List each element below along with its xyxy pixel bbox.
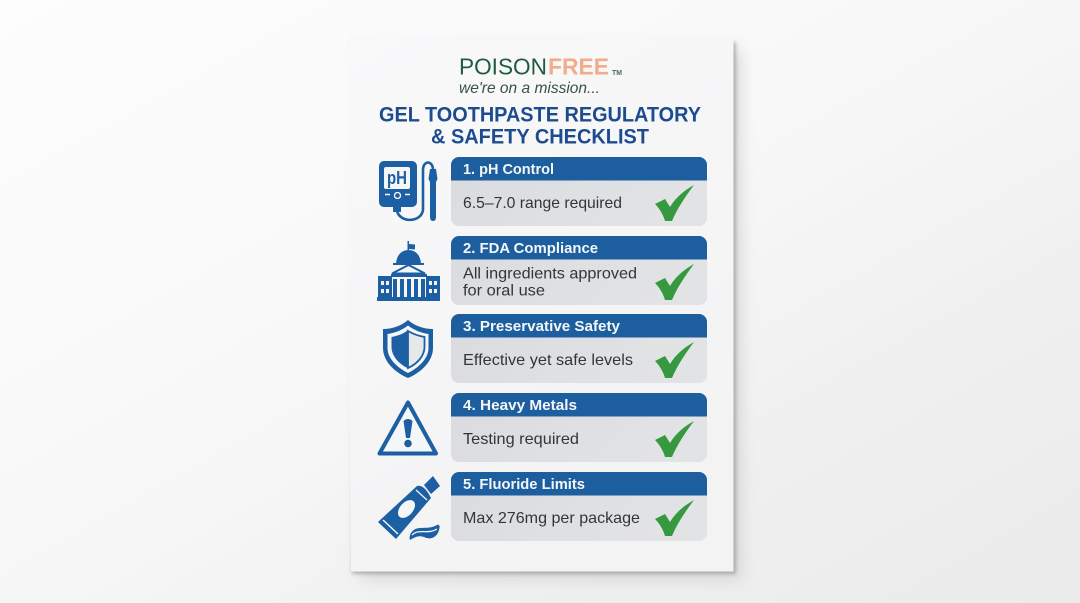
brand logo: POISON (459, 54, 547, 80)
checklist item 3: Preservative Safety (383, 314, 707, 383)
icon: pH meter: pH (387, 168, 407, 188)
icon: government building (377, 241, 440, 301)
card: FDA Compliance (451, 236, 707, 305)
icon: green check (655, 342, 694, 378)
card: Fluoride Limits: 5. Fluoride Limits (463, 476, 585, 493)
checklist item 5: Fluoride Limits (378, 472, 707, 541)
icon: green check (655, 500, 694, 536)
icon: green check (655, 185, 694, 221)
card: FDA Compliance: All ingredients approved (463, 266, 637, 282)
card: pH Control (451, 157, 707, 226)
card: Preservative Safety: 3. Preservative Safety (463, 318, 621, 335)
checklist item 1: pH Control (379, 157, 707, 226)
brand logo: TM (612, 68, 622, 77)
paper sheet (346, 34, 740, 578)
card: Heavy Metals: 4. Heavy Metals (463, 397, 577, 414)
icon: toothpaste tube (378, 476, 440, 540)
icon: pH meter (379, 161, 438, 221)
card: pH Control: 1. pH Control (463, 161, 554, 178)
title: & SAFETY CHECKLIST (431, 124, 649, 148)
icon: shield (383, 320, 433, 378)
title (379, 102, 701, 148)
icon: green check (655, 421, 694, 457)
card: FDA Compliance: 2. FDA Compliance (463, 240, 598, 257)
title: GEL TOOTHPASTE REGULATORY (379, 102, 701, 126)
icon: warning triangle (380, 402, 436, 454)
card: Heavy Metals (451, 393, 707, 462)
brand logo (459, 54, 622, 97)
card: Heavy Metals: Testing required (463, 431, 579, 448)
brand logo: FREE (548, 54, 609, 80)
checklist item 4: Heavy Metals (380, 393, 707, 462)
card: Preservative Safety (451, 314, 707, 383)
icon: green check (655, 264, 694, 300)
card: pH Control: 6.5–7.0 range required (463, 195, 622, 212)
checklist item 2: FDA Compliance (377, 236, 707, 305)
card: FDA Compliance: for oral use (463, 282, 545, 300)
card: Preservative Safety: Effective yet safe levels (463, 352, 633, 369)
card: Fluoride Limits (451, 472, 707, 541)
brand logo: we're on a mission... (459, 80, 600, 97)
card: Fluoride Limits: Max 276mg per package (463, 510, 640, 527)
